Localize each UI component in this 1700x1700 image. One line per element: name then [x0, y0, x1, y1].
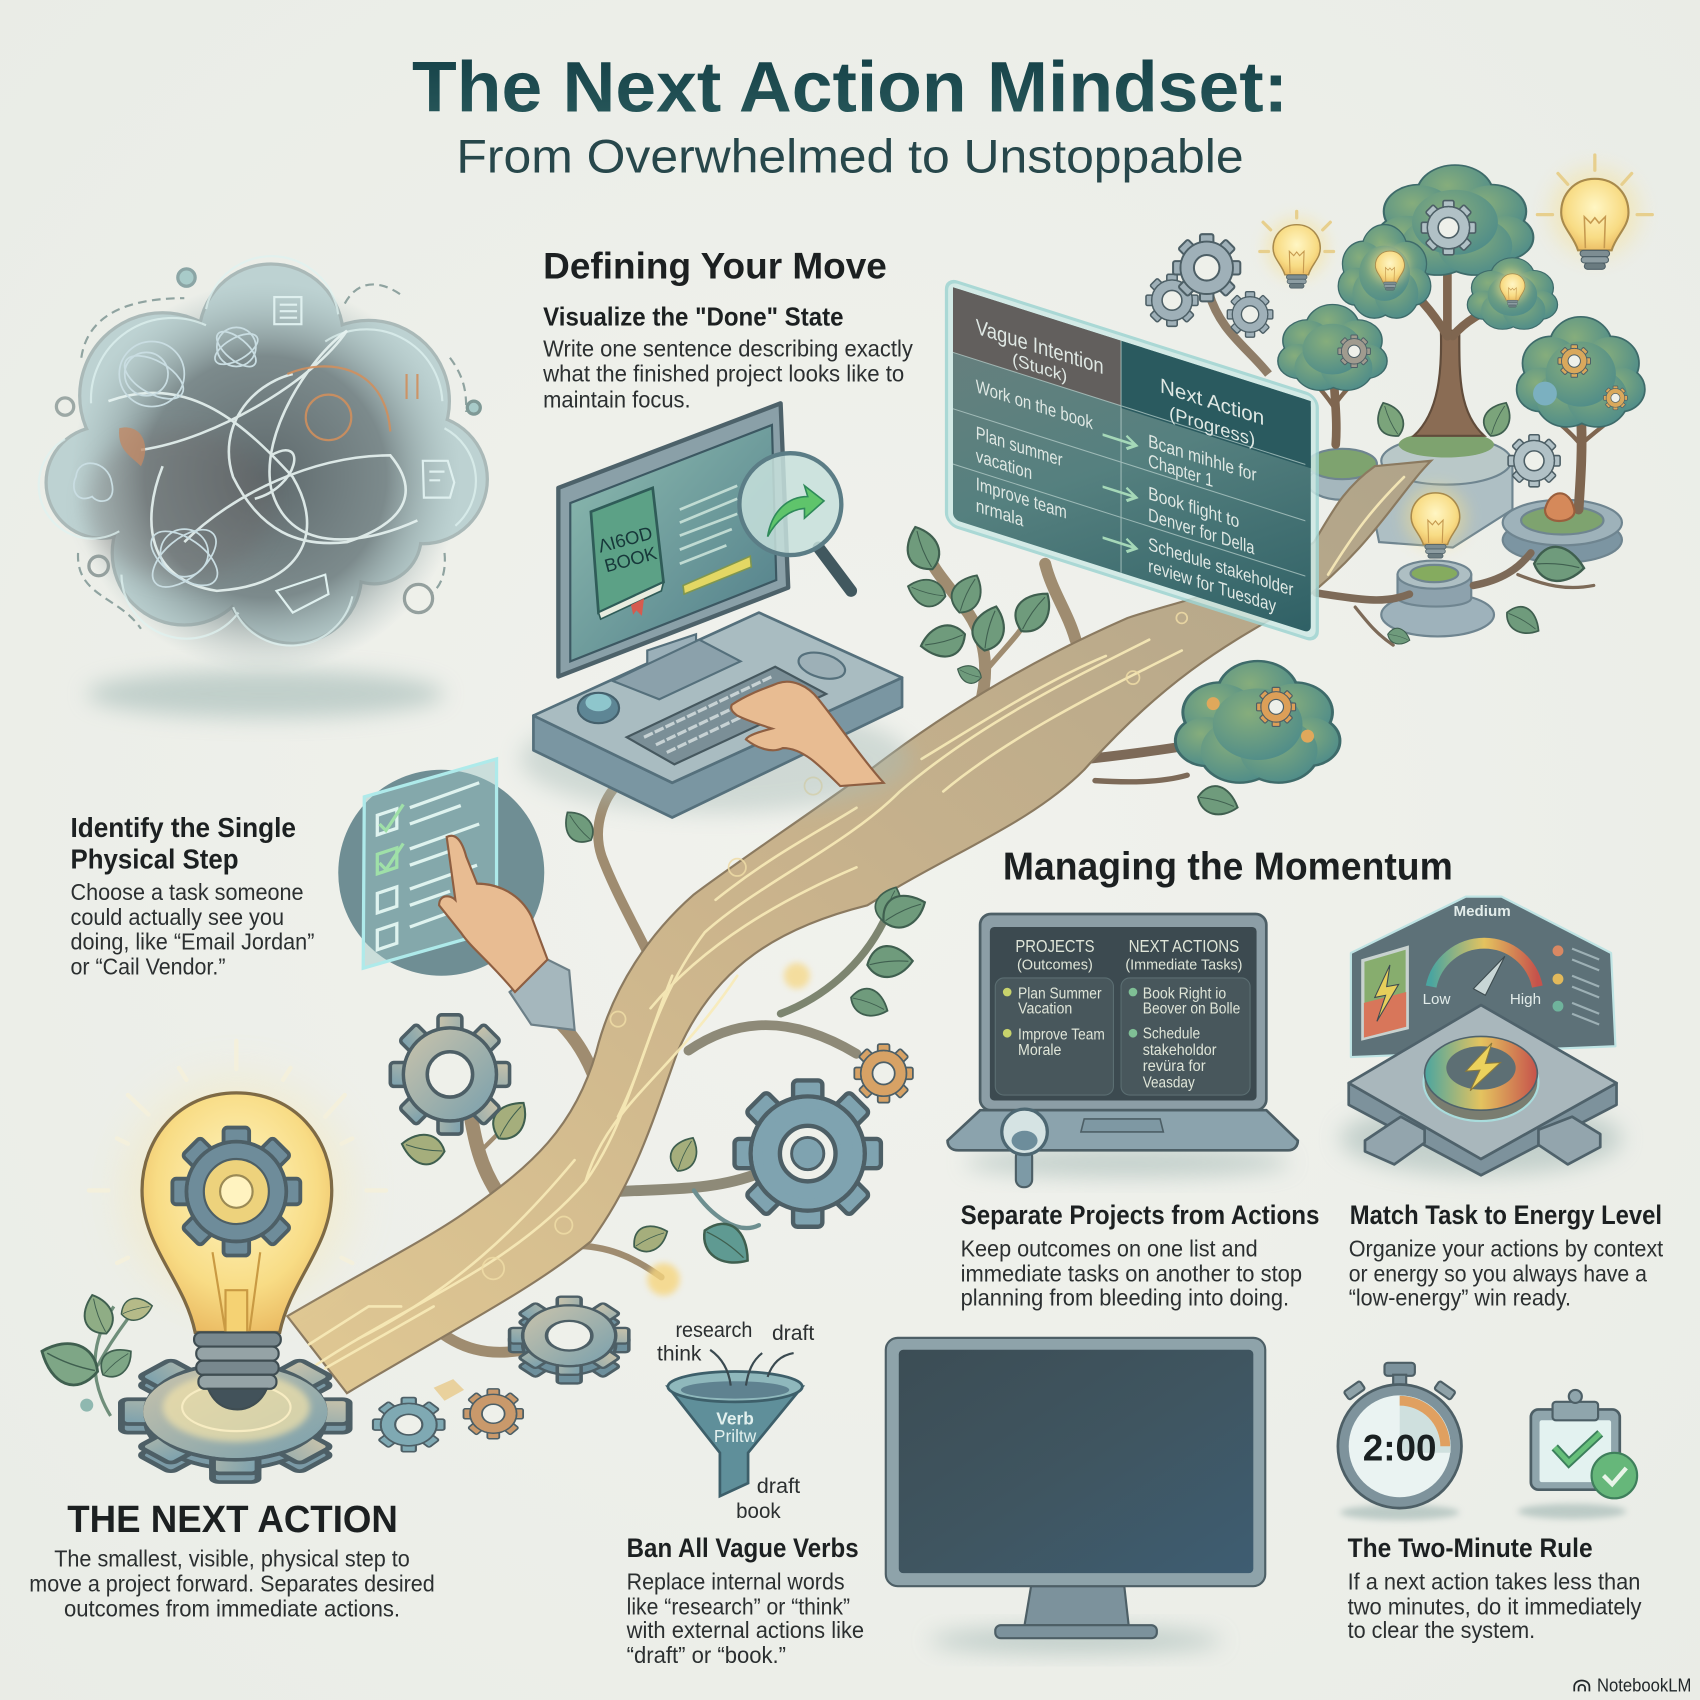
- table left rows: Work on the book: [976, 377, 1093, 434]
- gears along the trunk: [373, 963, 913, 1452]
- text block: Ban All Vague Verbs: “draft” or “book.”: [627, 1642, 786, 1668]
- projects list: Improve Team: [1018, 1027, 1105, 1044]
- text block: Ban All Vague Verbs: [626, 1532, 864, 1668]
- text block: Separate Projects from Actions: immediate tasks on another to stop: [961, 1261, 1302, 1287]
- next actions list: Book Right io: [1143, 986, 1226, 1003]
- text block: Separate Projects from Actions: Separate Projects from Actions: [961, 1199, 1319, 1230]
- text block: The Next Action: move a project forward. Separates desired: [29, 1571, 435, 1597]
- table left rows: [976, 377, 1093, 554]
- table left rows: Plan summer: [976, 423, 1062, 471]
- illustration: energy gauge platform: [1340, 897, 1622, 1175]
- desk: [533, 613, 902, 817]
- gauge dial: High: [1510, 991, 1541, 1008]
- magnifier on laptop: [1002, 1109, 1047, 1187]
- illustration: verb filter funnel: [657, 1317, 814, 1523]
- table left rows: Improve team: [976, 474, 1067, 524]
- gauge panel: [1351, 897, 1615, 1057]
- branches behind the trunk: [434, 553, 1594, 1352]
- bulb screw base: [194, 1332, 281, 1409]
- text block: Separate Projects from Actions: Keep outcomes on one list and: [961, 1236, 1258, 1262]
- text block: Ban All Vague Verbs: like “research” or “think”: [627, 1593, 850, 1619]
- pedestals: [1308, 432, 1622, 563]
- illustration: verb filter funnel: think: [657, 1341, 702, 1366]
- text block: Separate Projects from Actions: planning from bleeding into doing.: [961, 1284, 1289, 1310]
- text block: Ban All Vague Verbs: Replace internal words: [627, 1568, 845, 1594]
- text block: Separate Projects from Actions: [961, 1199, 1319, 1310]
- text block: Identify the Single Physical Step: [70, 811, 314, 980]
- gauge dial: [1423, 903, 1599, 1025]
- laptop headers: [1015, 936, 1242, 973]
- table header right: [1160, 375, 1264, 454]
- table right rows: Bcan mihhle for: [1148, 431, 1257, 486]
- gears on a branch: [1146, 234, 1273, 374]
- text block: Match Task to Energy Level: [1349, 1199, 1664, 1310]
- plant sprout: [34, 1291, 155, 1416]
- next actions list: revüra for: [1143, 1058, 1206, 1075]
- bulb glass: [142, 1093, 332, 1332]
- projects list: Morale: [1018, 1042, 1062, 1059]
- projects list: [995, 978, 1113, 1095]
- text block: Identify the Single Physical Step: or “Cail Vendor.”: [70, 954, 226, 980]
- next actions list: Beover on Bolle: [1143, 1001, 1241, 1018]
- book on screen: BOOK: [602, 542, 660, 576]
- title: [412, 48, 1288, 183]
- text block: The Next Action: outcomes from immediate actions.: [64, 1596, 400, 1622]
- table right rows: review for Tuesday: [1148, 556, 1277, 617]
- illustration: verb filter funnel: draft: [772, 1320, 814, 1345]
- projects list: Plan Summer: [1018, 986, 1102, 1003]
- text block: The Next Action: THE NEXT ACTION: [67, 1499, 398, 1541]
- illustration: clipboard with checkmark: [1518, 1390, 1637, 1519]
- table right rows: [1148, 431, 1293, 623]
- text block: Match Task to Energy Level: “low-energy” win ready.: [1349, 1284, 1571, 1310]
- table right rows: Schedule stakeholder: [1148, 534, 1293, 601]
- next actions list: Schedule: [1143, 1026, 1200, 1043]
- battery: [1363, 948, 1407, 1039]
- gauge dial: Low: [1423, 991, 1450, 1008]
- table left rows: vacation: [976, 446, 1032, 484]
- laptop headers: (Immediate Tasks): [1125, 956, 1242, 973]
- monitor: [558, 403, 788, 677]
- energy knob: [1424, 1036, 1538, 1121]
- tree trunks: [1306, 271, 1621, 510]
- hand on keyboard: [731, 682, 884, 786]
- tree crowns: [1279, 166, 1644, 426]
- text block: The Next Action: The smallest, visible, physical step to: [54, 1546, 410, 1572]
- text block: Identify the Single Physical Step: Choose a task someone: [70, 879, 304, 905]
- bush with gears: [1177, 662, 1338, 781]
- text block: Match Task to Energy Level: Organize your actions by context: [1349, 1236, 1664, 1262]
- projects list: Vacation: [1018, 1001, 1072, 1018]
- text block: Ban All Vague Verbs: Ban All Vague Verbs: [627, 1532, 859, 1563]
- text block: The Two-Minute Rule: If a next action takes less than: [1348, 1568, 1640, 1594]
- text block: Identify the Single Physical Step: Physical Step: [70, 842, 239, 874]
- gauge dial: Medium: [1453, 903, 1511, 920]
- table right rows: Book flight to: [1148, 483, 1239, 533]
- illustration: verb filter funnel: research: [675, 1317, 752, 1342]
- table header left: Vague Intention: [976, 314, 1104, 379]
- text block: The Next Action: [29, 1499, 435, 1622]
- bulb pedestal: [1381, 561, 1494, 636]
- next actions list: stakeholdor: [1143, 1042, 1216, 1059]
- illustration: blank monitor: [886, 1338, 1265, 1653]
- illustration: verb filter funnel: Verb: [716, 1409, 754, 1429]
- laptop headers: (Outcomes): [1017, 956, 1093, 973]
- text block: Visualize the Done State: maintain focus.: [543, 387, 691, 413]
- table header right: (Progress): [1169, 403, 1255, 451]
- text block: Visualize the Done State: [542, 301, 913, 413]
- keyboard: [627, 667, 826, 764]
- leaves on the branches: [399, 522, 1586, 1274]
- illustration: checklist circle with pointing hand: [338, 759, 575, 1030]
- table right rows: Denver for Della: [1148, 505, 1255, 559]
- text block: The Two-Minute Rule: to clear the system.: [1348, 1617, 1535, 1643]
- illustration: tangled thought cloud: [39, 256, 486, 718]
- text block: The Two-Minute Rule: two minutes, do it immediately: [1348, 1593, 1642, 1619]
- illustration: laptop with projects and next actions: [948, 914, 1298, 1187]
- comparison tree grove: [1146, 155, 1652, 636]
- NotebookLM logo: NotebookLM: [1597, 1674, 1691, 1695]
- text block: Identify the Single Physical Step: doing, like “Email Jordan”: [70, 929, 314, 955]
- text block: Identify the Single Physical Step: could actually see you: [70, 904, 284, 930]
- next actions list: [1121, 978, 1250, 1095]
- heading: Defining Your Move: Defining Your Move: [543, 246, 887, 287]
- illustration: stopwatch: [1338, 1363, 1461, 1520]
- heading: Managing the Momentum: Managing the Momentum: [1003, 845, 1453, 888]
- table header right: Next Action: [1160, 375, 1264, 430]
- title: From Overwhelmed to Unstoppable: [456, 130, 1244, 183]
- table left rows: nrmala: [976, 496, 1024, 532]
- table header left: (Stuck): [1012, 349, 1067, 386]
- bulb gear: [172, 1128, 300, 1255]
- light rays: [89, 1041, 386, 1263]
- text block: The Two-Minute Rule: The Two-Minute Rule: [1348, 1532, 1593, 1563]
- text block: Visualize the Done State: what the finished project looks like to: [542, 361, 904, 387]
- illustration: glowing lightbulb with gear: [34, 1041, 386, 1482]
- illustration: verb filter funnel: book: [736, 1498, 781, 1523]
- laptop headers: NEXT ACTIONS: [1129, 936, 1239, 956]
- illustration: desktop computer with book: [520, 403, 911, 817]
- magnifier with arrow: [739, 453, 851, 591]
- text block: Identify the Single Physical Step: Identify the Single: [70, 811, 296, 843]
- text block: Ban All Vague Verbs: with external actions like: [626, 1617, 864, 1643]
- illustration: verb filter funnel: Priltw: [714, 1426, 757, 1446]
- book on screen: ΛI6OD: [596, 522, 655, 557]
- title: The Next Action Mindset:: [412, 48, 1288, 128]
- lightbulbs: [1266, 168, 1639, 558]
- text block: The Two-Minute Rule: [1348, 1532, 1642, 1643]
- comparison table: vague intention vs next action: [946, 279, 1317, 642]
- text block: Visualize the Done State: Write one sentence describing exactly: [543, 336, 913, 362]
- platform: [1349, 1005, 1617, 1175]
- illustration: stopwatch: 2:00: [1363, 1427, 1437, 1468]
- next actions list: Veasday: [1143, 1074, 1195, 1091]
- tree trunk branch: [287, 461, 1431, 1393]
- table arrows: [1103, 428, 1136, 555]
- gear base: [121, 1350, 349, 1482]
- text block: Visualize the Done State: Visualize the "Done" State: [543, 301, 843, 331]
- table right rows: Chapter 1: [1148, 451, 1213, 492]
- illustration: verb filter funnel: draft: [757, 1473, 800, 1498]
- laptop headers: PROJECTS: [1015, 936, 1094, 956]
- monitor stand: [613, 634, 740, 699]
- text block: Match Task to Energy Level: or energy so you always have a: [1349, 1261, 1647, 1287]
- book on screen: [591, 488, 664, 619]
- text block: Match Task to Energy Level: Match Task to Energy Level: [1350, 1199, 1662, 1230]
